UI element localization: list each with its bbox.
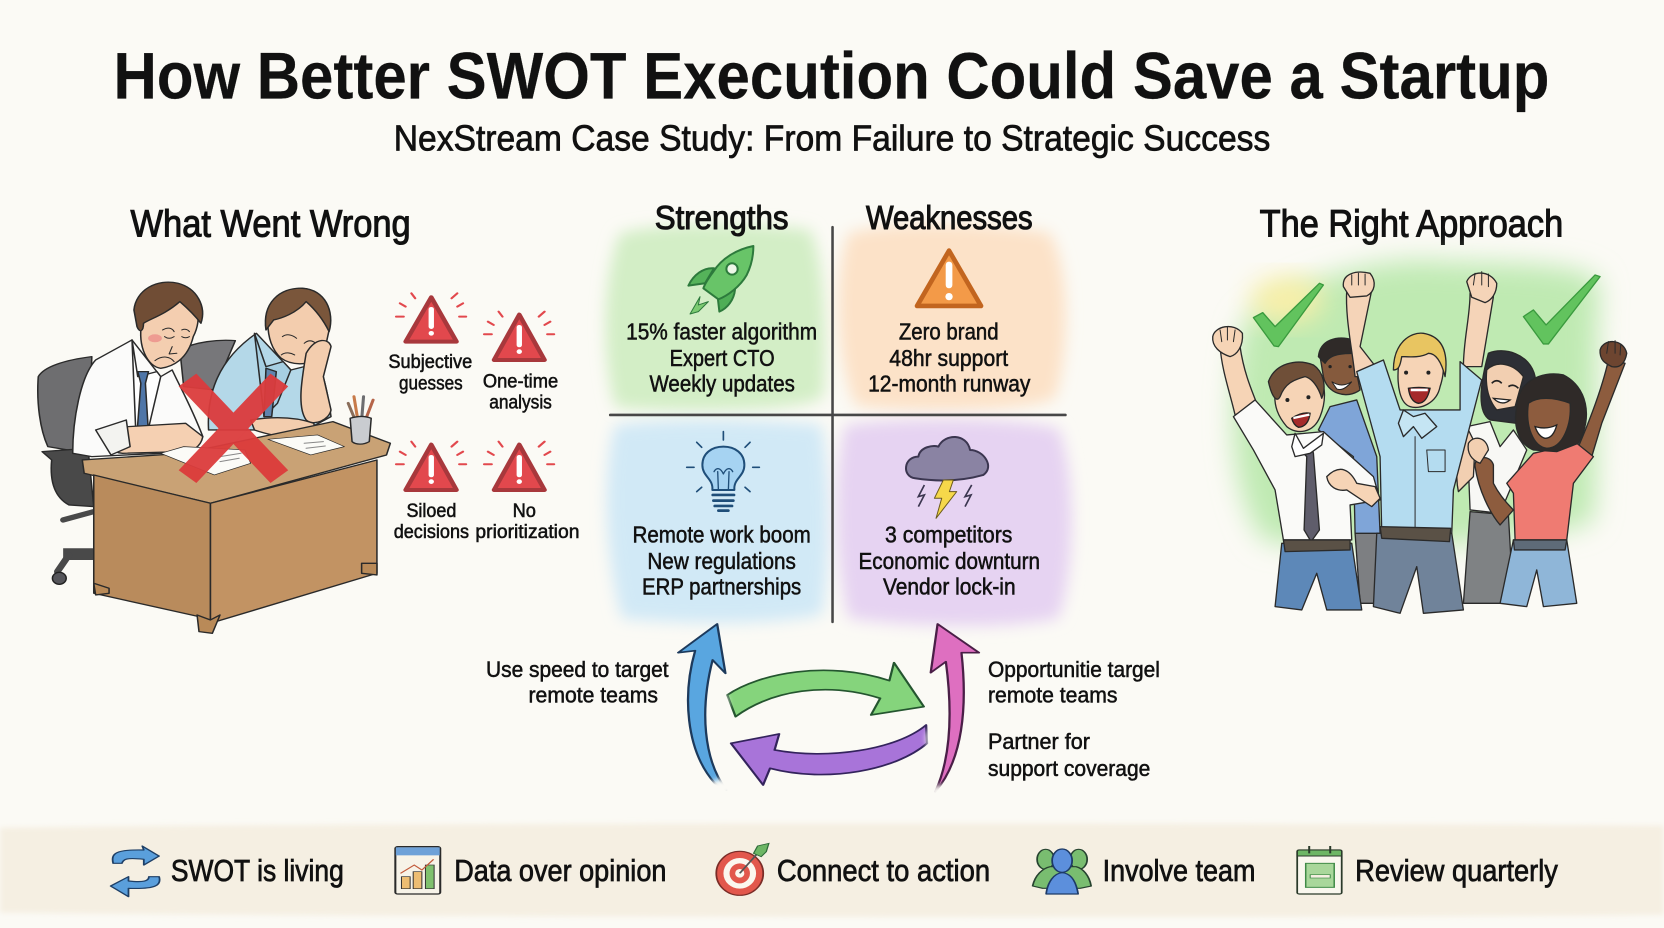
item: connect to action: Connect to action (777, 853, 990, 888)
strengths list: Weekly updates (649, 371, 795, 397)
arrow caption left: remote teams (528, 683, 658, 708)
icon: target (716, 843, 769, 895)
heading: strengths: Strengths (655, 199, 788, 236)
icon: orange warning (917, 251, 981, 306)
chair 2 (180, 340, 235, 390)
person 2 (208, 288, 331, 438)
weaknesses list: Zero brand (899, 319, 999, 345)
strengths list (626, 319, 817, 397)
warning labels: decisions (394, 522, 469, 543)
blob: opportunities (607, 420, 829, 623)
person: centre man (1343, 272, 1497, 613)
opportunities list (632, 521, 811, 599)
icon: chart card (395, 847, 440, 894)
item: SWOT is living: SWOT is living (171, 853, 344, 888)
green glow (1233, 260, 1600, 547)
warning labels: Siloed (406, 501, 456, 522)
arrow caption left (486, 657, 669, 708)
weaknesses list (868, 319, 1031, 397)
warning labels (388, 352, 579, 543)
icon: warning 4 (484, 442, 554, 490)
heading: the right approach: The Right Approach (1260, 203, 1563, 246)
arrow: blue up (678, 624, 726, 790)
arrow: green right (727, 663, 924, 717)
warning labels: Subjective (388, 352, 472, 373)
check mark 1 (1253, 283, 1323, 347)
opportunities list: Remote work boom (632, 521, 811, 547)
icon: rocket (688, 246, 753, 314)
strengths list: 15% faster algorithm (626, 319, 817, 345)
blob: strengths (605, 224, 825, 411)
heading: weaknesses: Weaknesses (866, 199, 1033, 236)
person: back man (1318, 338, 1380, 603)
warning labels: analysis (489, 393, 552, 414)
subtitle: NexStream Case Study: From Failure to Strategic Success (394, 118, 1270, 159)
person: left man (1213, 327, 1380, 610)
warnings grid (388, 293, 579, 543)
opportunities list: ERP partnerships (642, 573, 801, 599)
panel: SWOT matrix (605, 199, 1072, 626)
arrow caption right top: remote teams (988, 683, 1117, 708)
strengths list: Expert CTO (670, 345, 775, 371)
chair 1 (38, 357, 94, 584)
arrow caption left: Use speed to target (486, 657, 669, 682)
item: connect to action (716, 843, 990, 895)
icon: warning 3 (396, 442, 466, 490)
icon: calendar (1297, 846, 1342, 894)
person 1 (73, 282, 203, 457)
illustration: celebrating team (1213, 260, 1627, 613)
panel: what went wrong (38, 203, 579, 633)
item: review quarterly (1297, 846, 1558, 894)
desk (82, 422, 390, 633)
weaknesses list: 48hr support (889, 345, 1009, 371)
threats list: Economic downturn (859, 548, 1040, 574)
item: involve team: Involve team (1103, 853, 1255, 888)
opportunities list: New regulations (647, 548, 796, 574)
yellow glow (1250, 277, 1323, 323)
footer band (0, 823, 1664, 917)
threats list (859, 521, 1040, 599)
arrow caption right top: Opportunitie targel (988, 657, 1160, 682)
icon: warning 2 (484, 312, 554, 360)
icon: red X (188, 380, 279, 477)
panel: strategy arrows (486, 624, 1160, 798)
item: SWOT is living (111, 846, 344, 897)
threats list: Vendor lock-in (883, 573, 1016, 599)
icon: cycle arrows (111, 846, 160, 897)
item: data over opinion (395, 847, 666, 894)
arrow: purple left (731, 725, 927, 785)
warning labels: No (513, 501, 536, 522)
arrow caption right bottom: support coverage (988, 756, 1150, 781)
illustration: stressed workers at desk (38, 282, 390, 633)
item: involve team (1033, 849, 1255, 894)
panel: the right approach (1213, 203, 1627, 613)
heading: what went wrong: What Went Wrong (131, 203, 411, 246)
icon: light bulb (687, 432, 759, 511)
person: back woman (1457, 351, 1535, 603)
warning labels: One-time (483, 371, 558, 392)
arrow caption right bottom (988, 729, 1150, 781)
papers and pencil cup (161, 397, 373, 475)
blob: weaknesses (838, 224, 1066, 411)
icon: warning 1 (396, 293, 466, 342)
item: review quarterly: Review quarterly (1355, 853, 1558, 888)
arrow: pink up (931, 624, 979, 792)
icon: storm cloud (906, 437, 988, 518)
title: How Better SWOT Execution Could Save a Startup (114, 39, 1549, 113)
item: data over opinion: Data over opinion (454, 853, 666, 888)
arrow caption right top (988, 657, 1160, 708)
person: right woman (1468, 341, 1627, 607)
warning labels: prioritization (475, 522, 579, 543)
threats list: 3 competitors (885, 521, 1012, 547)
weaknesses list: 12-month runway (868, 371, 1031, 397)
arrow caption right bottom: Partner for (988, 729, 1090, 754)
warning labels: guesses (399, 373, 463, 394)
blob: threats (837, 419, 1072, 626)
check mark 2 (1523, 275, 1600, 344)
icon: people (1033, 849, 1091, 894)
